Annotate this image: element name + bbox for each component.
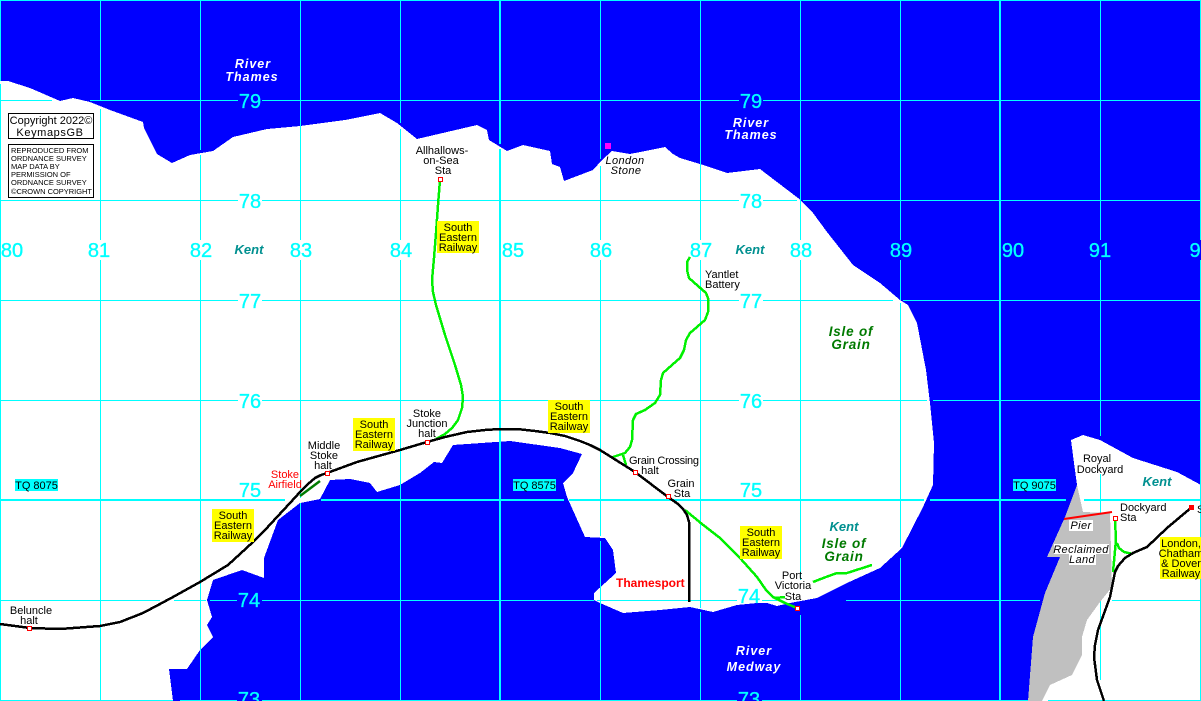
- place and station labels: Stoke: [271, 469, 299, 481]
- place and station labels: Dockyard: [1077, 464, 1123, 476]
- reclaimed land and pier labels: [1053, 520, 1109, 566]
- Isle of Grain labels: Grain: [824, 549, 864, 564]
- place and station labels: Airfield: [268, 479, 302, 491]
- green lines: dismantled branches: [432, 180, 1133, 608]
- Ordnance Survey notice: ©CROWN COPYRIGHT: [11, 187, 92, 196]
- railway company labels: Eastern: [742, 537, 780, 549]
- place and station labels: Allhallows-: [416, 145, 469, 157]
- place and station labels: Sta: [1120, 512, 1137, 524]
- railway company labels: Railway: [550, 421, 589, 433]
- place and station labels: Dockyard: [1120, 502, 1166, 514]
- easting number labels: 86: [590, 240, 612, 262]
- place and station labels: halt: [20, 615, 38, 627]
- grid reference tags: [15, 479, 1056, 492]
- reclaimed land and pier labels: Pier: [1070, 520, 1093, 532]
- northing number labels: 74: [738, 586, 760, 608]
- place and station labels: Thamesport: [616, 576, 685, 590]
- place and station labels: Grain Crossing: [629, 455, 699, 467]
- northing number labels: 75: [239, 480, 261, 502]
- land: Royal Dockyard and Kent mainland: [1028, 435, 1201, 701]
- northing number labels: 78: [740, 191, 762, 213]
- easting number labels: 83: [290, 240, 312, 262]
- place and station labels: Junction: [407, 418, 447, 430]
- place and station labels: Stone: [611, 165, 641, 177]
- northing number labels: 75: [740, 480, 762, 502]
- red pier: [1064, 512, 1112, 519]
- place and station labels: Sta: [785, 591, 802, 603]
- easting number labels: 85: [502, 240, 524, 262]
- easting number labels: 81: [88, 240, 110, 262]
- easting number labels: 82: [190, 240, 212, 262]
- Yantlet Battery branch: [613, 257, 708, 465]
- Port Victoria branch: [685, 510, 797, 608]
- Ordnance Survey notice: [8, 144, 94, 198]
- railway company labels: South: [747, 527, 775, 539]
- Dockyard branch: [1113, 520, 1133, 572]
- reclaimed land: [1028, 485, 1112, 701]
- Ordnance Survey notice: ORDNANCE SURVEY: [11, 178, 87, 187]
- railway company labels: Eastern: [439, 232, 477, 244]
- place and station labels: halt: [418, 428, 436, 440]
- place and station labels: Sta: [435, 165, 452, 177]
- easting number labels: 87: [690, 240, 712, 262]
- reclaimed land and pier labels: Reclaimed: [1053, 544, 1109, 556]
- northing number labels: 77: [740, 291, 762, 313]
- railway company labels: South: [555, 401, 583, 413]
- railway company labels: Railway: [214, 530, 253, 542]
- easting number labels: [1, 240, 1201, 262]
- railway company labels: & Dover: [1161, 558, 1201, 570]
- railway company labels: Eastern: [550, 411, 588, 423]
- Isle of Grain labels: Isle of: [829, 324, 874, 339]
- railway company labels: Eastern: [214, 520, 252, 532]
- grid reference tags: TQ 9075: [1013, 480, 1056, 492]
- place and station labels: Stoke: [310, 450, 338, 462]
- railway company labels: London,: [1161, 538, 1201, 550]
- easting number labels: 80: [1, 240, 23, 262]
- water labels: Thames: [225, 70, 279, 84]
- Ordnance Survey notice: MAP DATA BY: [11, 162, 60, 171]
- railway company labels: South: [360, 419, 388, 431]
- easting number labels: 89: [890, 240, 912, 262]
- county labels: Kent: [830, 519, 859, 534]
- railway company labels: South: [219, 510, 247, 522]
- northing number labels: 78: [239, 191, 261, 213]
- copyright box: KeymapsGB: [16, 127, 84, 139]
- water labels: River: [235, 57, 271, 71]
- place and station labels: Royal: [1083, 453, 1111, 465]
- place and station labels: Battery: [705, 279, 740, 291]
- easting number labels: 88: [790, 240, 812, 262]
- northing number labels: 77: [239, 291, 261, 313]
- easting number labels: 84: [390, 240, 412, 262]
- black railway: South Eastern Railway main line: [0, 429, 689, 629]
- place and station labels: on-Sea: [423, 155, 460, 167]
- railway company labels: Eastern: [355, 429, 393, 441]
- place and station labels: Port: [782, 570, 802, 582]
- railway company labels: Railway: [742, 547, 781, 559]
- Isle of Grain labels: Grain: [831, 337, 871, 352]
- place and station labels: London: [605, 155, 645, 167]
- county labels: Kent: [235, 242, 264, 257]
- grid reference tags: TQ 8575: [513, 480, 556, 492]
- airfield runway: [300, 481, 320, 496]
- water labels: River: [736, 644, 772, 658]
- Sheerness station marker: [1189, 505, 1194, 510]
- London Stone marker: [605, 143, 611, 149]
- water labels: [225, 57, 781, 674]
- place and station labels: Sta: [674, 488, 691, 500]
- easting number labels: 9: [1189, 240, 1201, 262]
- Isle of Grain labels: Isle of: [822, 536, 867, 551]
- place and station labels: [10, 145, 1201, 627]
- easting number labels: 90: [1002, 240, 1024, 262]
- northing number labels: 74: [238, 590, 260, 612]
- Ordnance Survey notice: PERMISSION OF: [11, 170, 71, 179]
- northing number labels: 76: [740, 391, 762, 413]
- railway company labels: Railway: [439, 242, 478, 254]
- land: Isle of Grain and Hoo peninsula: [0, 81, 934, 701]
- county labels: Kent: [1143, 474, 1172, 489]
- place and station labels: Victoria: [775, 580, 812, 592]
- copyright box: [8, 114, 94, 139]
- Ordnance Survey notice: REPRODUCED FROM: [11, 146, 89, 155]
- grid reference tags: TQ 8075: [15, 480, 58, 492]
- easting number labels: 91: [1089, 240, 1111, 262]
- place and station labels: Yantlet: [705, 269, 738, 281]
- northing number labels: 76: [239, 391, 261, 413]
- copyright box: Copyright 2022©: [10, 115, 92, 127]
- railway company labels: South: [444, 222, 472, 234]
- county labels: Kent: [736, 242, 765, 257]
- black railway: London Chatham and Dover line: [1094, 507, 1192, 701]
- water labels: Thames: [724, 128, 778, 142]
- place and station labels: Beluncle: [10, 605, 52, 617]
- northing number labels: 79: [740, 91, 762, 113]
- county labels: [235, 242, 1172, 534]
- place and station labels: halt: [641, 465, 659, 477]
- water labels: River: [733, 116, 769, 130]
- pier extension east of Port Victoria: [813, 565, 872, 582]
- railway company labels: Railway: [1162, 568, 1201, 580]
- place and station labels: Grain: [668, 478, 694, 490]
- Allhallows branch: [432, 180, 463, 439]
- reclaimed land and pier labels: Land: [1069, 554, 1096, 566]
- railway company labels: Railway: [355, 439, 394, 451]
- place and station labels: Middle: [308, 440, 340, 452]
- northing number labels: [237, 91, 763, 701]
- station markers: [28, 178, 1118, 630]
- Ordnance Survey notice: ORDNANCE SURVEY: [11, 154, 87, 163]
- place and station labels: Stoke: [413, 408, 441, 420]
- railway company labels: [212, 221, 1201, 580]
- place and station labels: halt: [314, 460, 332, 472]
- water labels: Medway: [727, 660, 781, 674]
- Isle of Grain labels: [822, 324, 874, 564]
- northing number labels: 79: [239, 91, 261, 113]
